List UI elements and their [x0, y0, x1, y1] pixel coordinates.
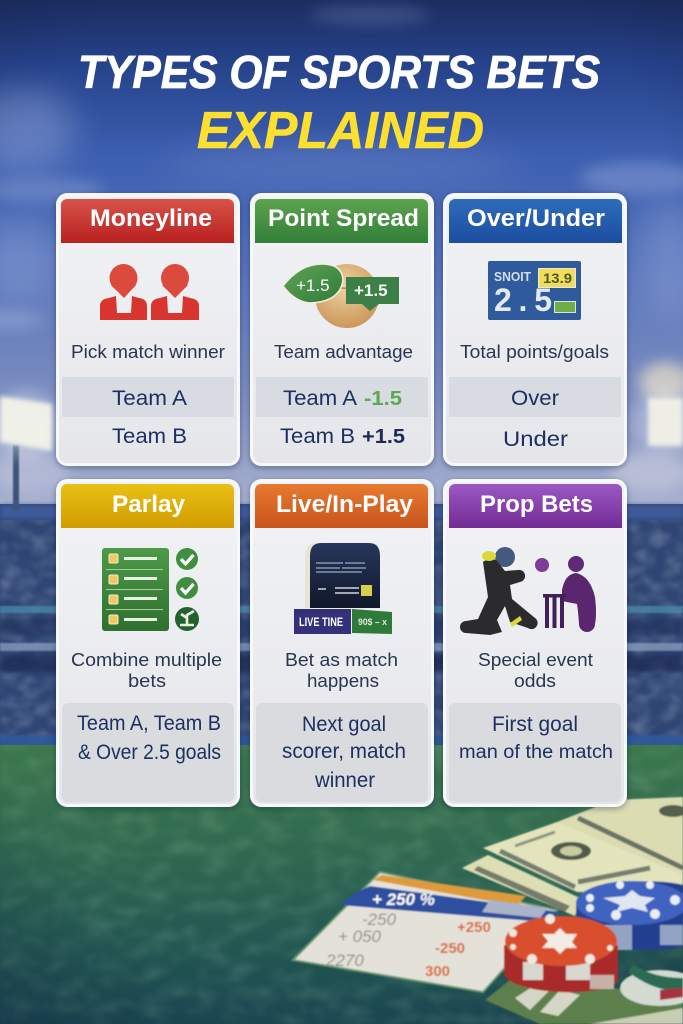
panel: over/under — [444, 194, 626, 464]
panel: point spread — [252, 194, 432, 464]
example bets: Team A, Team B — [77, 712, 221, 735]
option: team b +1.5: Team B — [280, 425, 355, 448]
red chips — [504, 914, 618, 992]
panel: live/in-play — [252, 480, 432, 806]
description — [71, 650, 222, 691]
example bets — [449, 703, 621, 802]
cash — [462, 797, 683, 916]
icon: scoreboard: 2.5 — [494, 282, 552, 318]
grass field — [0, 745, 683, 1024]
icon: parlay checklist — [102, 548, 199, 631]
green chips — [620, 964, 683, 1006]
panel: moneyline — [58, 194, 238, 464]
floodlight right — [633, 388, 683, 452]
blue chips — [576, 881, 683, 950]
header: parlay — [61, 484, 234, 528]
description: Pick match winner — [71, 342, 225, 362]
example bets: Next goal — [302, 713, 386, 736]
icon: ball with spread tags: +1.5 — [296, 276, 330, 295]
title: TYPES OF SPORTS BETS — [78, 46, 600, 98]
icon: phone with live badge: LIVE TINE — [299, 617, 343, 629]
option: team a -1.5: -1.5 — [364, 388, 402, 410]
option: team a -1.5 — [256, 377, 428, 417]
panel: parlay — [58, 480, 238, 806]
example bets: winner — [314, 769, 375, 792]
header: point spread: Point Spread — [268, 205, 419, 232]
description: Special event — [478, 650, 593, 670]
description — [478, 650, 593, 691]
example bets: man of the match — [459, 742, 613, 763]
icon: phone with live badge — [294, 543, 392, 634]
option: over: Over — [511, 387, 559, 410]
option: team a: Team A — [112, 387, 187, 410]
icon: player and wicket — [460, 547, 596, 635]
option: team b: Team B — [112, 425, 187, 448]
icon: scoreboard — [488, 261, 581, 320]
option: under: Under — [503, 428, 568, 451]
option: team a — [62, 377, 234, 417]
betting slip: + 250 % — [372, 890, 435, 909]
betting slip: 2270 — [325, 951, 364, 970]
betting slip: -250 — [362, 910, 397, 929]
icon: two people — [100, 264, 199, 320]
header: prop bets: Prop Bets — [480, 491, 593, 518]
icon: scoreboard: SNOIT — [494, 270, 531, 284]
example bets: scorer, match — [282, 740, 406, 763]
description — [285, 650, 398, 691]
description: bets — [128, 671, 166, 691]
stadium crowd — [0, 504, 683, 747]
floodlight left — [0, 390, 59, 510]
icon: scoreboard: 13.9 — [543, 271, 572, 286]
header: over/under — [449, 199, 622, 243]
title: EXPLAINED — [197, 102, 484, 160]
example bets — [62, 703, 234, 802]
betting slip, cash and chips — [293, 797, 683, 1024]
description: Bet as match — [285, 650, 398, 670]
header: point spread — [255, 199, 428, 243]
option: team b +1.5 — [280, 425, 405, 448]
title — [78, 46, 600, 160]
betting slip — [293, 872, 560, 992]
icon: phone with live badge: 90$ – x — [358, 617, 387, 627]
header: moneyline: Moneyline — [90, 205, 212, 232]
green mat — [485, 972, 683, 1024]
header: moneyline — [61, 199, 234, 243]
betting slip: + 050 — [338, 927, 382, 946]
description: Team advantage — [274, 342, 413, 362]
header: parlay: Parlay — [112, 491, 186, 518]
option: team b +1.5: +1.5 — [362, 426, 405, 448]
example bets: & Over 2.5 goals — [78, 741, 221, 764]
betting slip: -250 — [435, 940, 465, 957]
header: prop bets — [449, 484, 622, 528]
betting slip: 300 — [425, 963, 450, 980]
clouds — [0, 5, 683, 492]
icon: ball with spread tags — [283, 264, 399, 328]
example bets: First goal — [492, 713, 578, 736]
header: live/in-play — [255, 484, 428, 528]
description: happens — [307, 671, 379, 691]
header: live/in-play: Live/In-Play — [276, 491, 414, 518]
betting slip: +250 — [457, 919, 491, 936]
example bets — [256, 703, 428, 802]
panel: prop bets — [444, 480, 626, 806]
description: Combine multiple — [71, 650, 222, 670]
header: over/under: Over/Under — [467, 205, 605, 232]
option: team a -1.5: Team A — [283, 387, 357, 410]
description: odds — [514, 671, 556, 691]
description: Total points/goals — [460, 342, 609, 362]
option: over — [449, 377, 621, 417]
icon: ball with spread tags: +1.5 — [354, 281, 388, 300]
